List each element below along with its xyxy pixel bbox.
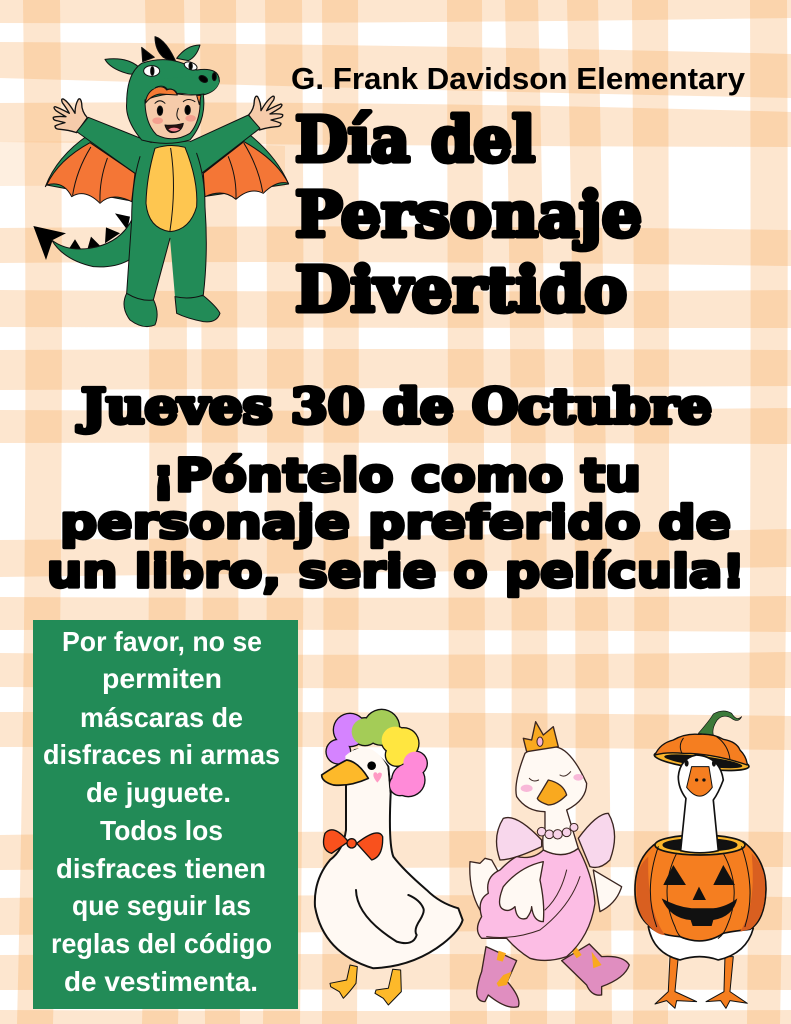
title: Día del Personaje Divertido: Divertido	[295, 253, 627, 326]
panel: dress code rules: reglas del código	[51, 928, 272, 959]
dragon wings	[45, 135, 289, 203]
panel: dress code rules: permiten	[102, 663, 222, 694]
panel: dress code rules: disfraces tienen	[56, 853, 266, 884]
panel: dress code rules: que seguir las	[72, 890, 251, 921]
dragon tail	[33, 213, 132, 267]
dragon body and feet	[124, 142, 220, 327]
call to action text	[47, 449, 745, 598]
icon: goose princess	[470, 722, 629, 1007]
date: Jueves 30 de Octubre: Jueves 30 de Octubre	[77, 379, 712, 435]
panel: dress code rules: máscaras de	[80, 702, 243, 733]
call to action text: personaje preferido de	[60, 496, 731, 549]
panel: dress code rules: Por favor, no se	[62, 626, 262, 657]
call to action text: ¡Póntelo como tu	[152, 449, 641, 502]
icon: goose in pumpkin	[635, 711, 766, 1008]
panel: dress code rules	[33, 620, 298, 1009]
panel: dress code rules: de juguete.	[86, 777, 231, 808]
panel: dress code rules: disfraces ni armas	[43, 739, 280, 770]
call to action text: un libro, serie o película!	[47, 545, 745, 598]
panel: dress code rules: de vestimenta.	[64, 966, 258, 997]
icon: goose with clown wig	[315, 709, 463, 1005]
panel: dress code rules: Todos los	[100, 815, 223, 846]
heading: school name: G. Frank Davidson Elementary	[291, 61, 746, 96]
title: Día del Personaje Divertido: Personaje	[295, 178, 642, 251]
icon: dragon costume child	[33, 37, 289, 327]
dragon head	[105, 37, 219, 143]
title: Día del Personaje Divertido: Día del	[295, 103, 535, 176]
dragon arms and hands	[53, 96, 283, 173]
title: Día del Personaje Divertido	[295, 103, 642, 326]
